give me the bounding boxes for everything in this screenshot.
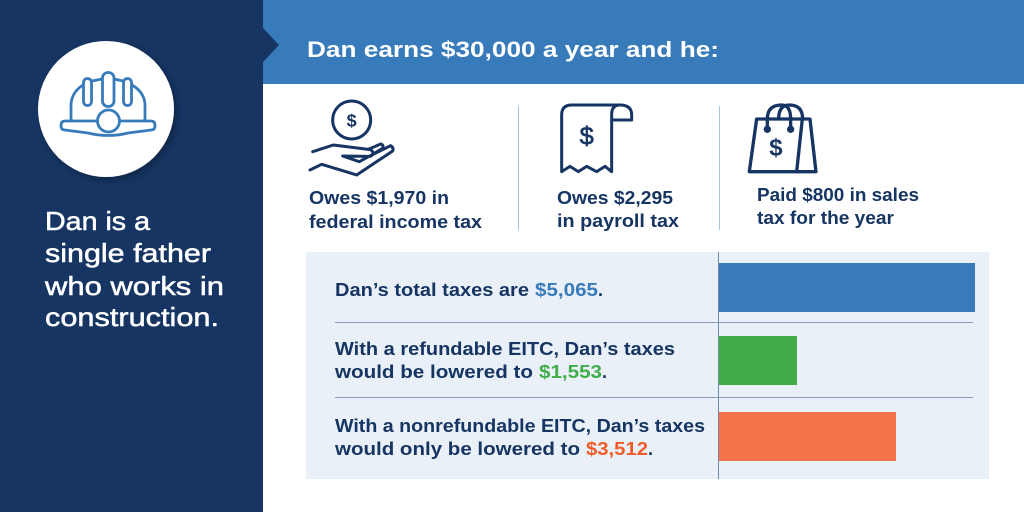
row text: total taxes xyxy=(335,280,603,300)
row text: refundable EITC xyxy=(334,339,675,382)
header banner xyxy=(263,0,1024,84)
row text: total taxes: . xyxy=(598,280,603,300)
row text: refundable EITC: would be lowered to xyxy=(334,362,533,382)
label: sales tax: Paid $800 in sales xyxy=(757,185,919,205)
row text: nonrefundable EITC xyxy=(334,416,705,459)
label: federal income tax xyxy=(309,188,482,232)
label: sales tax xyxy=(757,185,919,228)
icon: hard hat xyxy=(61,72,155,136)
row text: refundable EITC: . xyxy=(602,362,607,382)
bar chart xyxy=(718,252,975,479)
icon: hand with coin xyxy=(310,101,393,175)
panel: tax comparison xyxy=(306,252,989,479)
column: sales tax xyxy=(749,105,919,228)
row text: nonrefundable EITC: $3,512 xyxy=(586,439,648,459)
left panel xyxy=(0,0,279,512)
label: federal income tax: Owes $1,970 in xyxy=(309,188,449,208)
person description: who works in xyxy=(44,271,224,301)
icon: shopping bag: $ xyxy=(769,134,783,161)
icon: shopping bag xyxy=(749,105,816,172)
column: payroll tax xyxy=(557,105,679,231)
label: payroll tax xyxy=(557,188,679,231)
person description: Dan is a xyxy=(45,206,151,236)
icon: receipt: $ xyxy=(580,122,594,150)
person description xyxy=(44,206,224,332)
row text: refundable EITC: $1,553 xyxy=(539,362,602,382)
label: payroll tax: in payroll tax xyxy=(557,211,679,231)
label: payroll tax: Owes $2,295 xyxy=(557,188,673,208)
label: federal income tax: federal income tax xyxy=(309,212,482,232)
label: sales tax: tax for the year xyxy=(757,208,894,228)
row text: total taxes: $5,065 xyxy=(535,280,598,300)
icon: hand with coin: $ xyxy=(347,111,357,131)
heading: Dan earns $30,000 a year and he: xyxy=(307,37,719,62)
person description: single father xyxy=(45,238,211,268)
column: federal income tax xyxy=(309,101,482,232)
row text: total taxes: Dan’s total taxes are xyxy=(335,280,529,300)
row text: refundable EITC: With a refundable EITC, Dan’s taxes xyxy=(335,339,675,359)
person description: construction. xyxy=(45,302,219,332)
row text: nonrefundable EITC: . xyxy=(648,439,653,459)
row text: nonrefundable EITC: would only be lowered to xyxy=(334,439,580,459)
row text: nonrefundable EITC: With a nonrefundable EITC, Dan’s taxes xyxy=(335,416,705,436)
